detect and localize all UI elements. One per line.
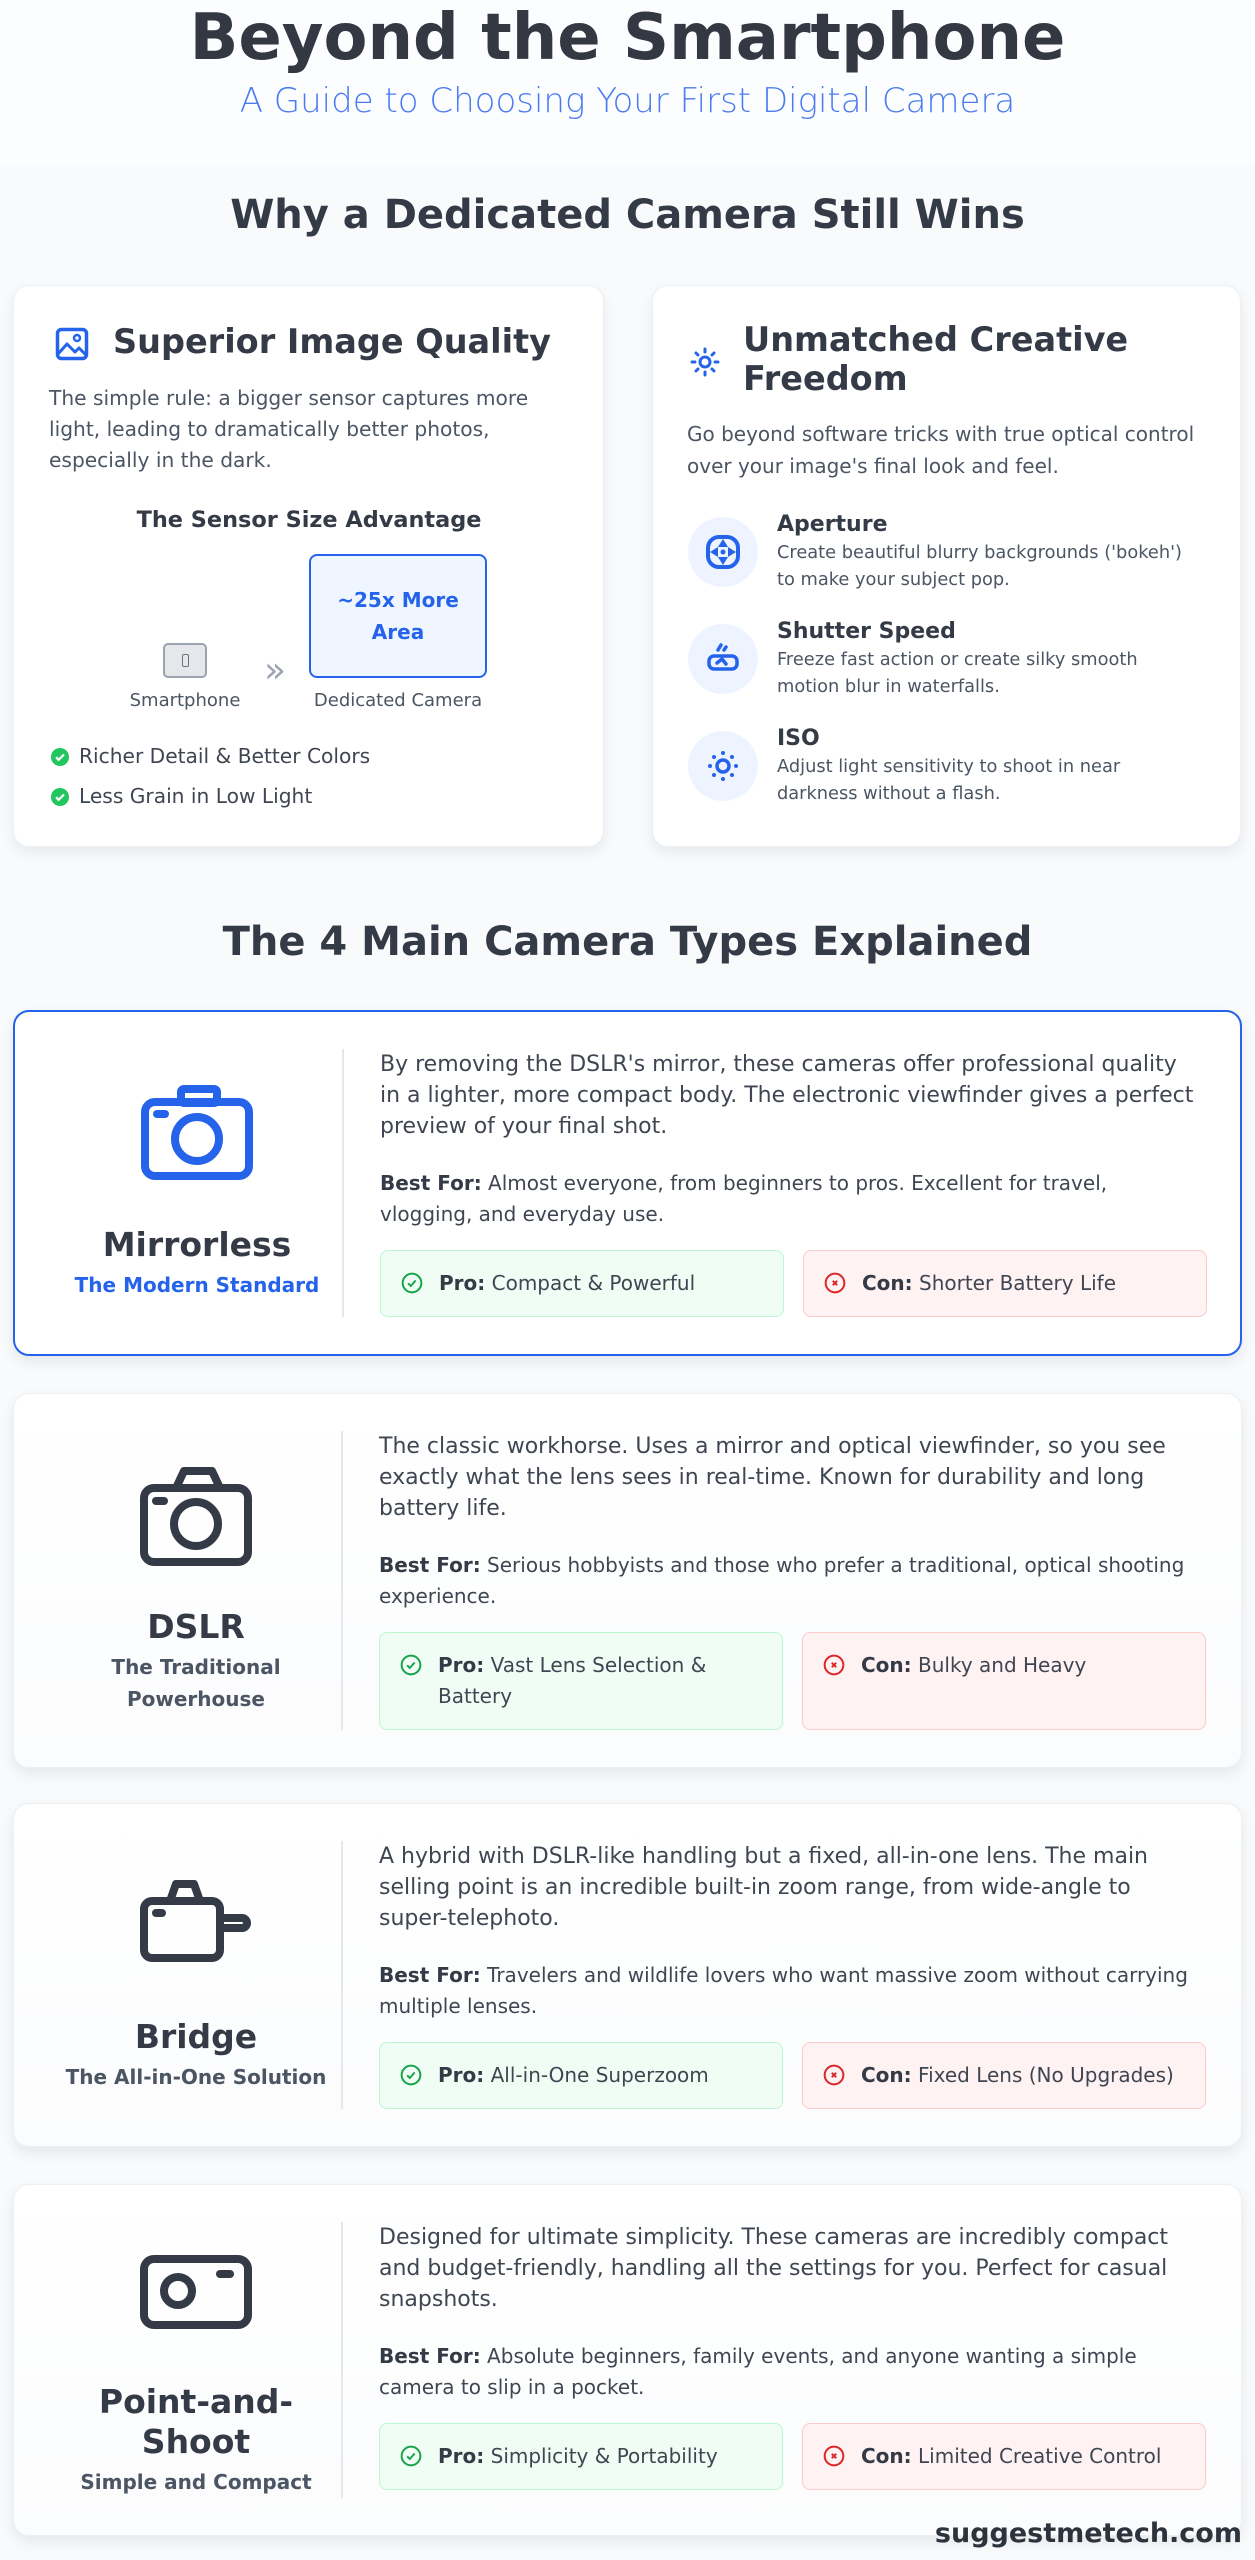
dslr details: Con: Bulky and Heavy <box>861 1653 1086 1677</box>
heading: Unmatched Creative <box>743 320 1128 359</box>
panel: mirrorless <box>13 1010 1242 1356</box>
point-and-shoot details: Con: Limited Creative Control <box>861 2444 1161 2468</box>
mirrorless identity: Mirrorless <box>103 1225 291 1264</box>
item: shutter speed: motion blur in waterfalls. <box>777 676 1000 697</box>
item: iso <box>688 726 1120 804</box>
mirrorless details <box>342 1049 1207 1317</box>
benefits list: Less Grain in Low Light <box>79 784 312 808</box>
point-and-shoot details <box>341 2222 1206 2498</box>
labels: Smartphone <box>130 690 240 711</box>
mirrorless details: Best For: Almost everyone, from beginners to pros. Excellent for travel, <box>380 1171 1107 1195</box>
footer brand: suggestmetech.com <box>935 2518 1242 2549</box>
dslr details: Best For: Serious hobbyists and those who prefer a traditional, optical shooting <box>379 1553 1184 1577</box>
bridge details: A hybrid with DSLR-like handling but a fixed, all-in-one lens. The main <box>379 1844 1148 1869</box>
text block: over your image's final look and feel. <box>687 454 1059 478</box>
mirrorless details: Con: Shorter Battery Life <box>862 1271 1116 1295</box>
section heading: why: Why a Dedicated Camera Still Wins <box>230 192 1025 238</box>
camera sensor box <box>309 554 487 678</box>
item: shutter speed: Shutter Speed <box>777 619 956 644</box>
dslr identity: The Traditional <box>111 1654 281 1678</box>
dslr identity: Powerhouse <box>127 1686 265 1710</box>
point-and-shoot identity: Point-and- <box>99 2382 293 2421</box>
item: iso: darkness without a flash. <box>777 783 1001 804</box>
camera sensor box: ~25x More <box>337 588 459 612</box>
subtitle: A Guide to Choosing Your First Digital Camera <box>240 81 1015 121</box>
icon: sun <box>690 348 720 376</box>
bridge identity: Bridge <box>135 2017 257 2056</box>
dslr details: The classic workhorse. Uses a mirror and optical viewfinder, so you see <box>379 1434 1166 1459</box>
dslr details: Battery <box>438 1684 512 1708</box>
bridge details: multiple lenses. <box>379 1994 537 2018</box>
icon: image <box>56 328 88 360</box>
icon: bridge camera <box>140 1880 251 1962</box>
smartphone sensor <box>163 643 207 678</box>
benefits list: Richer Detail & Better Colors <box>79 744 370 768</box>
mirrorless details: By removing the DSLR's mirror, these cameras offer professional quality <box>380 1052 1177 1077</box>
panel: bridge <box>13 1803 1242 2147</box>
item: aperture: Aperture <box>777 512 888 537</box>
bridge details: selling point is an incredible built-in zoom range, from wide-angle to <box>379 1875 1131 1900</box>
point-and-shoot identity: Simple and Compact <box>80 2470 312 2494</box>
icon: compact camera <box>140 2255 252 2329</box>
header band <box>0 0 1255 165</box>
dslr details <box>341 1431 1206 1730</box>
icon: dslr camera <box>140 1467 252 1566</box>
mirrorless details: preview of your final shot. <box>380 1114 667 1139</box>
heading <box>743 320 1128 398</box>
panel: creative freedom <box>652 285 1241 847</box>
item: shutter speed: Freeze fast action or create silky smooth <box>777 649 1138 670</box>
point-and-shoot details: snapshots. <box>379 2287 498 2312</box>
text block: light, leading to dramatically better photos, <box>49 417 490 441</box>
bridge details: Pro: All-in-One Superzoom <box>438 2063 709 2087</box>
point-and-shoot identity: Shoot <box>142 2422 250 2461</box>
heading: Freedom <box>743 359 908 398</box>
text block <box>687 422 1194 478</box>
item: iso: ISO <box>777 726 820 751</box>
dslr identity <box>111 1467 281 1710</box>
bridge details: Best For: Travelers and wildlife lovers who want massive zoom without carrying <box>379 1963 1188 1987</box>
point-and-shoot identity <box>80 2255 312 2494</box>
heading: Superior Image Quality <box>113 322 551 361</box>
item: iso: Adjust light sensitivity to shoot in near <box>777 756 1120 777</box>
bridge identity: The All-in-One Solution <box>66 2065 326 2089</box>
point-and-shoot details: Designed for ultimate simplicity. These cameras are incredibly compact <box>379 2225 1168 2250</box>
panel: superior image quality: Dedicated Camera <box>314 690 482 711</box>
panel: superior image quality <box>13 285 604 847</box>
point-and-shoot details: camera to slip in a pocket. <box>379 2375 644 2399</box>
arrow: » <box>264 650 286 691</box>
icon: mirrorless camera <box>141 1085 253 1180</box>
camera sensor box: Area <box>372 620 424 644</box>
panel: dslr <box>13 1393 1242 1768</box>
dslr details: battery life. <box>379 1496 507 1521</box>
point-and-shoot details: Best For: Absolute beginners, family events, and anyone wanting a simple <box>379 2344 1137 2368</box>
dslr details: Pro: Vast Lens Selection & <box>438 1653 706 1677</box>
item: shutter speed <box>688 619 1138 697</box>
mirrorless details: in a lighter, more compact body. The electronic viewfinder gives a perfect <box>380 1083 1193 1108</box>
bridge details <box>341 1841 1206 2109</box>
benefits list <box>51 744 370 808</box>
dslr details: exactly what the lens sees in real-time. Known for durability and long <box>379 1465 1144 1490</box>
text block: especially in the dark. <box>49 448 272 472</box>
mirrorless details: vlogging, and everyday use. <box>380 1202 664 1226</box>
text block: The simple rule: a bigger sensor captures more <box>49 386 528 410</box>
dslr identity: DSLR <box>147 1606 245 1646</box>
mirrorless identity: The Modern Standard <box>75 1273 319 1297</box>
item: aperture: to make your subject pop. <box>777 569 1010 590</box>
panel: point-and-shoot <box>13 2184 1242 2536</box>
point-and-shoot details: Pro: Simplicity & Portability <box>438 2444 718 2468</box>
title: Beyond the Smartphone <box>190 1 1065 75</box>
mirrorless identity <box>74 1085 319 1297</box>
item: aperture: Create beautiful blurry backgrounds ('bokeh') <box>777 542 1182 563</box>
text block: Go beyond software tricks with true optical control <box>687 422 1194 446</box>
bridge details: super-telephoto. <box>379 1906 559 1931</box>
bridge identity <box>66 1880 326 2089</box>
mirrorless details: Pro: Compact & Powerful <box>439 1271 695 1295</box>
sensor heading: The Sensor Size Advantage <box>137 507 481 533</box>
section heading: types: The 4 Main Camera Types Explained <box>223 919 1032 965</box>
text block <box>48 386 528 472</box>
item: aperture <box>688 512 1182 590</box>
point-and-shoot details: and budget-friendly, handling all the settings for you. Perfect for casual <box>379 2256 1167 2281</box>
bridge details: Con: Fixed Lens (No Upgrades) <box>861 2063 1174 2087</box>
dslr details: experience. <box>379 1584 496 1608</box>
